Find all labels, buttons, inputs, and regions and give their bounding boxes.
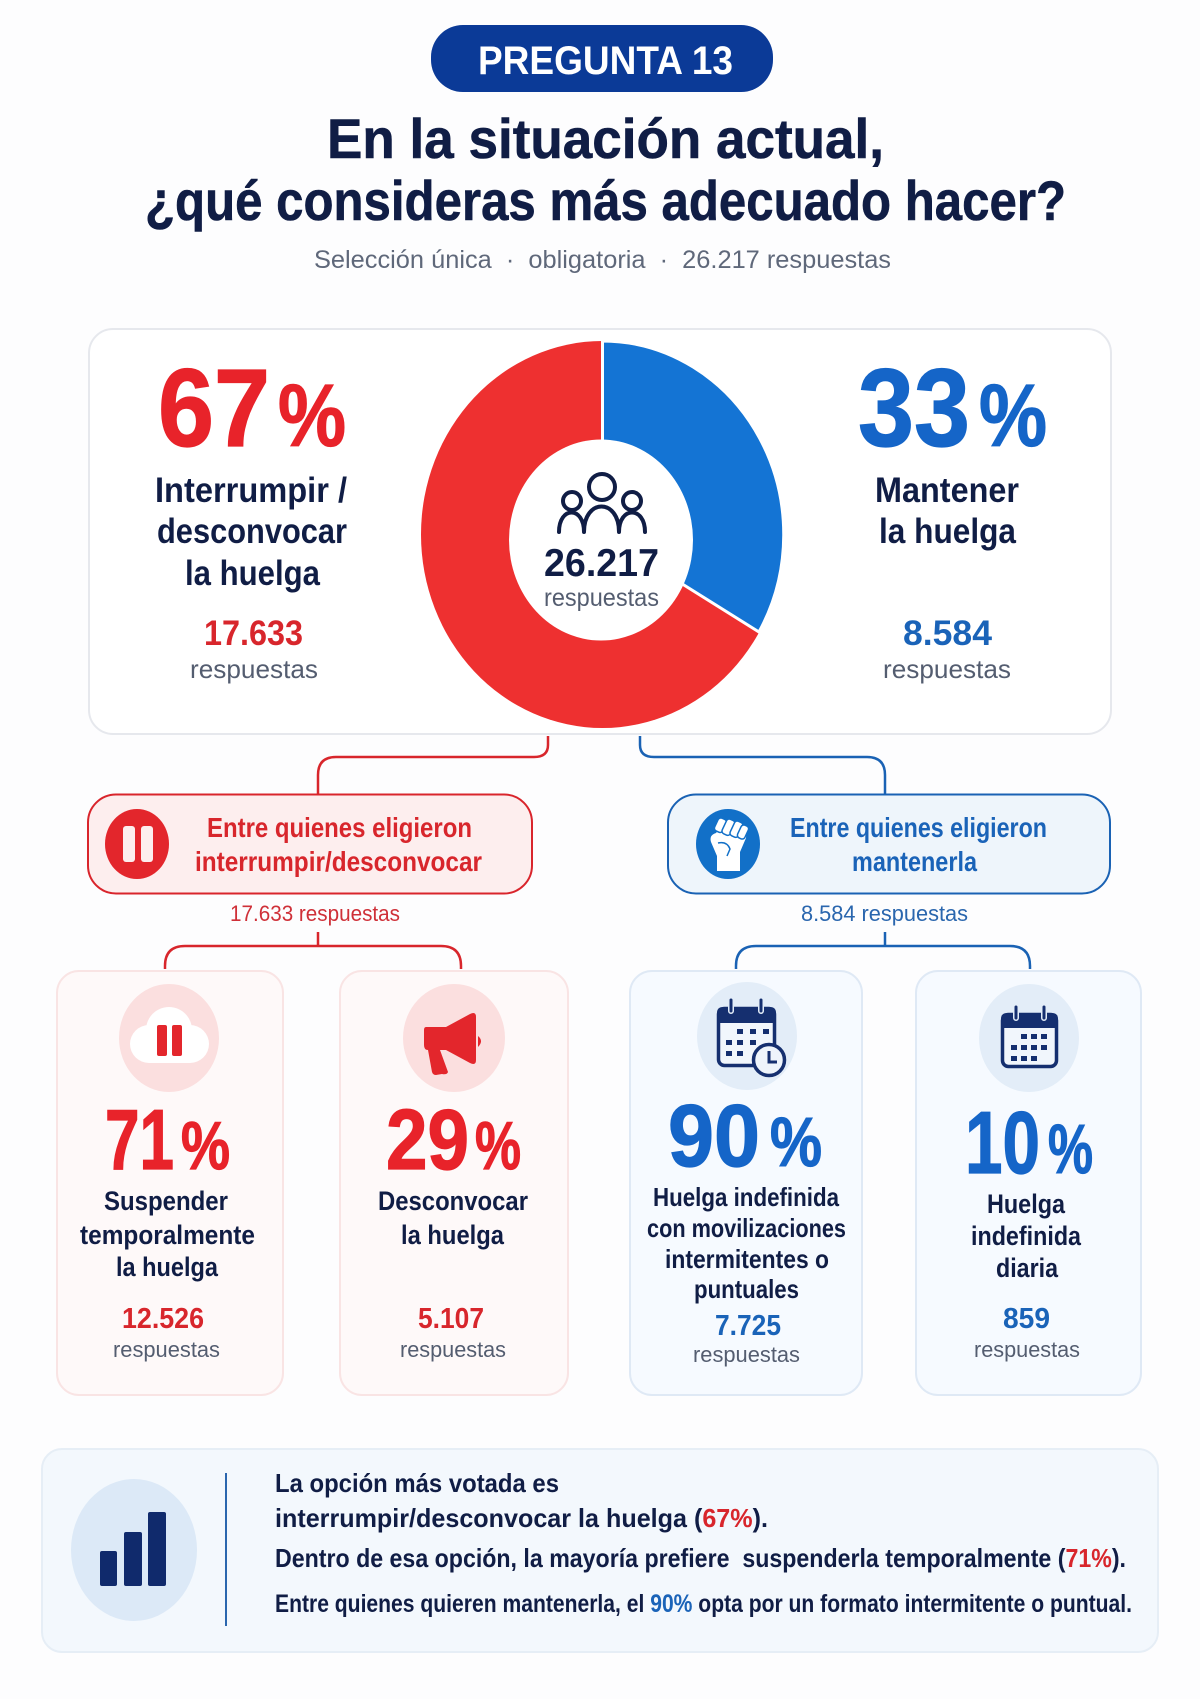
stat: 67% interrupt: la huelga bbox=[185, 554, 320, 593]
stat: 33% maintain: respuestas bbox=[883, 654, 1011, 684]
card: desconvocar: la huelga bbox=[401, 1220, 505, 1250]
card: suspender temporalmente: 12.526 bbox=[122, 1303, 204, 1335]
card: desconvocar: % bbox=[475, 1108, 521, 1184]
stat: 33% maintain: 33 bbox=[858, 347, 970, 470]
card: huelga diaria: % bbox=[1048, 1110, 1093, 1188]
summary text bbox=[275, 1468, 1132, 1618]
panel: group header interrupt: Entre quienes eligieron bbox=[207, 812, 472, 843]
card: huelga diaria bbox=[916, 971, 1141, 1395]
count: 17.633 respuestas: 17.633 respuestas bbox=[230, 901, 400, 926]
panel: group header maintain: Entre quienes eligieron bbox=[790, 812, 1047, 843]
connector: red to group header bbox=[318, 736, 548, 794]
summary text: interrumpir/desconvocar la huelga (67%). bbox=[275, 1503, 768, 1533]
total responses: 26.217 bbox=[544, 542, 659, 585]
icon: calendar bbox=[979, 984, 1079, 1092]
icon: cloud pause bbox=[119, 984, 219, 1092]
divider bbox=[225, 1473, 227, 1626]
icon: pause bbox=[105, 809, 169, 879]
stat: 33% maintain bbox=[858, 347, 1047, 684]
card: huelga diaria: respuestas bbox=[974, 1337, 1080, 1362]
title bbox=[145, 107, 1066, 232]
card: suspender temporalmente: % bbox=[181, 1108, 230, 1184]
connector: blue to group header bbox=[640, 736, 885, 794]
card: suspender temporalmente: la huelga bbox=[116, 1252, 219, 1282]
card: huelga diaria: indefinida bbox=[971, 1221, 1082, 1251]
card: desconvocar: respuestas bbox=[400, 1337, 506, 1362]
card: huelga intermitente: 7.725 bbox=[715, 1310, 781, 1342]
card: huelga intermitente: Huelga indefinida bbox=[653, 1182, 839, 1212]
panel: group header interrupt: interrumpir/desconvocar bbox=[195, 846, 482, 877]
stat: 33% maintain: % bbox=[979, 366, 1047, 465]
card: huelga diaria: 10 bbox=[965, 1093, 1040, 1192]
card: huelga intermitente: con movilizaciones bbox=[647, 1213, 846, 1243]
card: suspender temporalmente: Suspender bbox=[104, 1186, 228, 1216]
connector: blue bracket bbox=[736, 932, 1030, 969]
card: suspender temporalmente: 71 bbox=[105, 1093, 174, 1188]
stat: 33% maintain: 8.584 bbox=[903, 614, 993, 653]
total responses bbox=[544, 542, 659, 612]
card: huelga intermitente: % bbox=[770, 1103, 822, 1181]
donut chart bbox=[421, 341, 784, 728]
summary text: La opción más votada es bbox=[275, 1468, 559, 1498]
panel: overall result bbox=[89, 329, 1111, 734]
title: ¿qué consideras más adecuado hacer? bbox=[145, 169, 1066, 232]
count: 8.584 respuestas: 8.584 respuestas bbox=[801, 901, 968, 926]
card: huelga diaria: 859 bbox=[1003, 1303, 1050, 1335]
connector: red bracket bbox=[165, 932, 461, 969]
stat: 67% interrupt: 17.633 bbox=[204, 614, 303, 653]
card: suspender temporalmente: respuestas bbox=[113, 1337, 220, 1362]
panel: group header maintain: mantenerla bbox=[852, 846, 977, 877]
card: suspender temporalmente: temporalmente bbox=[80, 1220, 255, 1250]
title: En la situación actual, bbox=[327, 107, 884, 170]
stat: 67% interrupt bbox=[155, 347, 347, 684]
card: huelga intermitente: puntuales bbox=[694, 1274, 799, 1304]
subtitle: Selección única · obligatoria · 26.217 respuestas bbox=[314, 246, 891, 274]
stat: 67% interrupt: respuestas bbox=[190, 654, 318, 684]
icon: bar chart bbox=[71, 1479, 197, 1621]
card: huelga diaria: Huelga bbox=[987, 1189, 1066, 1219]
icon: calendar with clock bbox=[697, 982, 797, 1090]
badge: Pregunta 13: PREGUNTA 13 bbox=[478, 39, 733, 83]
card: desconvocar bbox=[340, 971, 568, 1395]
card: desconvocar: 5.107 bbox=[418, 1303, 484, 1335]
summary text: Entre quienes quieren mantenerla, el 90% opta por un formato intermitente o puntual. bbox=[275, 1590, 1132, 1618]
panel: group header interrupt bbox=[88, 794, 532, 894]
stat: 67% interrupt: Interrumpir / bbox=[155, 471, 347, 510]
icon: megaphone bbox=[403, 984, 505, 1092]
stat: 33% maintain: Mantener bbox=[875, 471, 1019, 510]
panel: conclusion bbox=[42, 1449, 1158, 1652]
card: desconvocar: 29 bbox=[386, 1093, 469, 1188]
card: suspender temporalmente bbox=[57, 971, 283, 1395]
card: huelga intermitente: respuestas bbox=[693, 1342, 800, 1367]
badge: Pregunta 13 bbox=[431, 25, 773, 92]
card: huelga intermitente: intermitentes o bbox=[665, 1244, 829, 1274]
card: huelga intermitente bbox=[630, 971, 862, 1395]
icon: people bbox=[559, 474, 645, 532]
stat: 67% interrupt: % bbox=[278, 366, 346, 465]
icon: raised fist bbox=[696, 809, 760, 879]
stat: 67% interrupt: 67 bbox=[158, 347, 270, 470]
total responses: respuestas bbox=[544, 584, 659, 612]
stat: 67% interrupt: desconvocar bbox=[157, 512, 347, 551]
summary text: Dentro de esa opción, la mayoría prefiere suspenderla temporalmente (71%). bbox=[275, 1543, 1126, 1573]
card: desconvocar: Desconvocar bbox=[378, 1186, 528, 1216]
panel: group header maintain bbox=[668, 794, 1110, 894]
card: huelga intermitente: 90 bbox=[668, 1086, 760, 1185]
stat: 33% maintain: la huelga bbox=[879, 512, 1016, 551]
card: huelga diaria: diaria bbox=[996, 1253, 1059, 1283]
